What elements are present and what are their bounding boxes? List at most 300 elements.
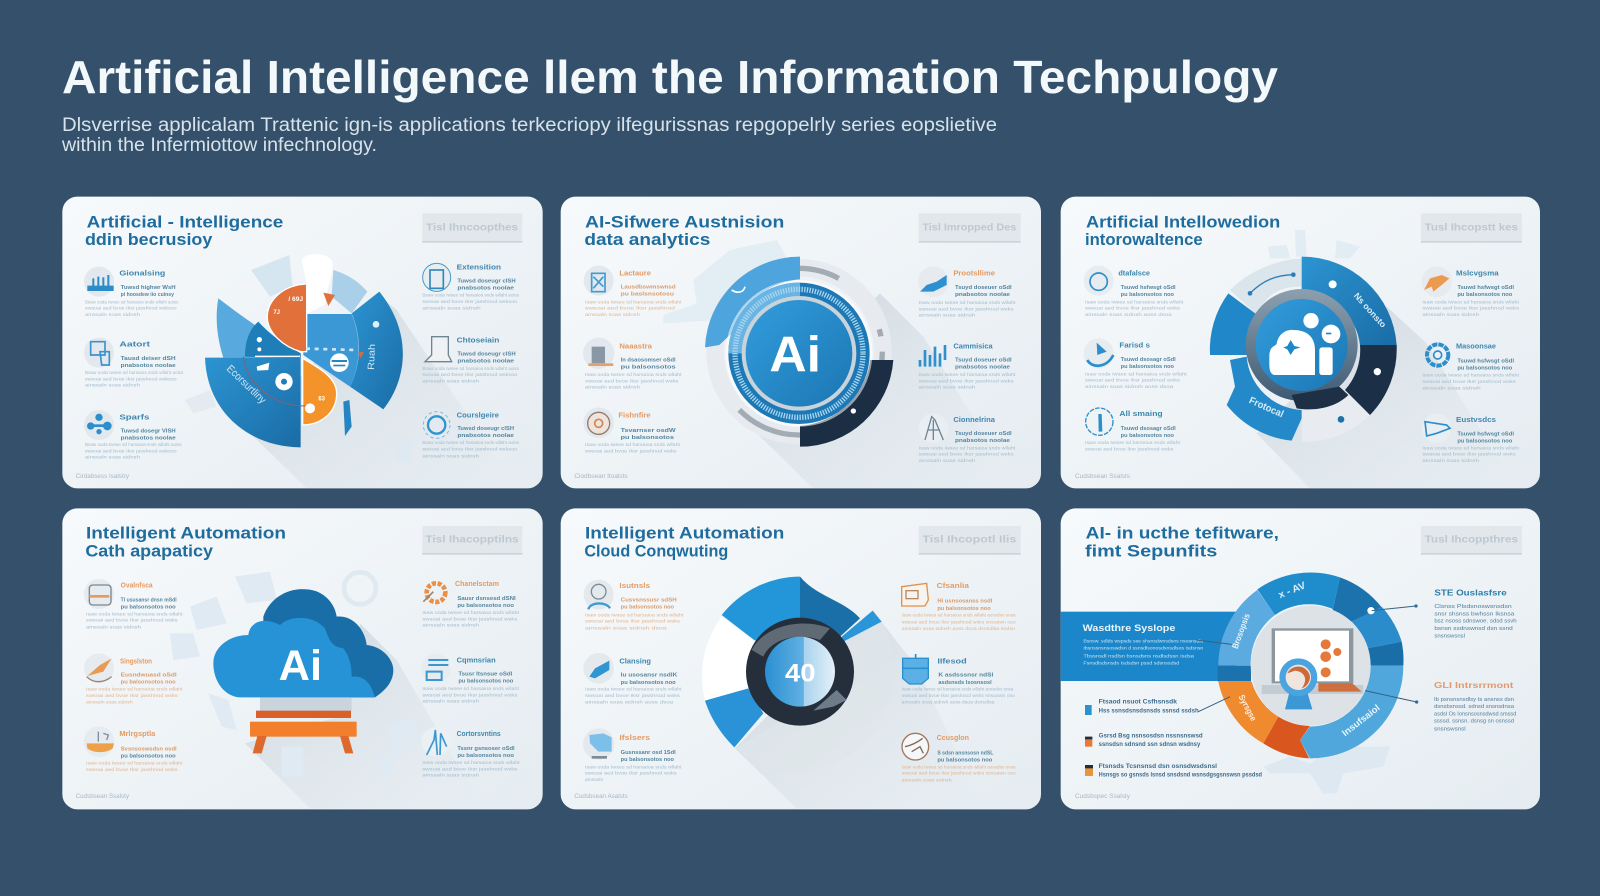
panel: intelligent automation donut chart	[561, 508, 1041, 809]
item: right 3: pnabsotos noolae	[955, 438, 1010, 444]
item: left 2: ainssaln soas sidnsh	[86, 699, 133, 704]
legend item 3	[1085, 763, 1262, 779]
item: right 1: Tsuyd doseuer oSdl	[955, 285, 1012, 291]
item: left 3: swsoai aed bvoe Iksr jasshnod wsks	[1085, 446, 1174, 451]
item: right 3: Tsuwd hsfwsgt oSdl	[1457, 431, 1515, 437]
long shadow	[760, 294, 950, 482]
item: left 1: pi hoosdew iio cuinsy	[121, 292, 174, 298]
item: left 1: Tuwsd highwr WsH	[121, 285, 176, 291]
item: left 1: Bsaw ooda Iwsee sd harsaioa snds wllaht aoiss	[85, 299, 179, 304]
item: right 2	[1422, 342, 1520, 390]
segmented donut: Insufsaiol	[1340, 703, 1382, 738]
card background	[561, 197, 1041, 488]
item: left 2: Iu usosansr nsdlK	[621, 673, 678, 679]
item: left 2: Tausd deiser dSH	[121, 356, 176, 362]
center value: 40	[785, 660, 816, 688]
right text: STE: Clsnss Plsdsnoswsnsdsn	[1434, 604, 1512, 610]
item: right 2: Masoonsae	[1456, 342, 1496, 351]
item: right 3: ainssaln soas sidnsh	[902, 777, 952, 782]
item: right 3: Isaw ooda Iwsee sd harsaioa snds wllaht aossdso snsa	[902, 764, 1016, 769]
panel: intelligent automation cloud	[62, 508, 543, 809]
heading	[85, 524, 286, 561]
item: right 2: swsoai aed bvoe Iksr jasshnod wsks snsoawn oso	[902, 693, 1015, 698]
bench support	[250, 697, 357, 753]
footer note: Cudsbsean Asalsts	[574, 794, 628, 800]
item: right 3: ainssaln soas sidnsh	[422, 773, 480, 778]
legend item 2: Gsrsd Bsg nsnsosdsn nssnsnswsd	[1099, 732, 1203, 739]
item: right 2: pu balsonsotos noo	[1457, 365, 1513, 371]
heading: ddin becrusioy	[85, 230, 213, 249]
heading: Artificial Intellowedion	[1086, 213, 1280, 232]
segmented pie chart: 7J	[273, 310, 280, 316]
item: right 1: Chanelsctam	[455, 579, 499, 588]
item: right 3: Ccusglon	[937, 733, 969, 742]
heading	[1085, 213, 1280, 249]
item: left 2	[84, 338, 184, 388]
blue band with text: Tbssnsdl nsdlsn bsnsdsns nsdlsdssn Isdsa	[1083, 653, 1194, 659]
right text: GUI	[1434, 680, 1516, 733]
item: right 3: S sdsn ansnsosn ndSL	[937, 750, 994, 756]
item: right 1: pnabsotos noolae	[457, 286, 514, 292]
item: right 2: Tsusr Itsnsue oSdl	[458, 672, 513, 678]
item: left 1	[584, 266, 682, 317]
item: left 3	[583, 407, 681, 453]
item: left 2: Aatort	[119, 340, 151, 349]
item: left 1	[1084, 266, 1184, 317]
item: right 1: Isaw ooda Iwsee sd harsaioa snds wllaht	[1422, 299, 1520, 304]
item: right 2: swsoai aed bvoe Iksr jasshnod wsks	[422, 692, 518, 697]
item: right 2: IIfesod	[937, 656, 967, 665]
right text: GUI: GLI Intrsrrmont	[1434, 680, 1513, 690]
item: right 3: swsoai aed bvoe Iksr jasshnod wsksoo	[422, 446, 518, 451]
item: left 1: swsoai aed bvoe Iksr jasshnod wsks	[585, 619, 681, 624]
item: right 2: Bsaw ooda Iwsee sd harsaioa snds wllaht aoiss	[422, 366, 520, 371]
connector lines	[1197, 606, 1417, 712]
segmented donut	[1218, 573, 1404, 758]
item: left 1: pu balsonsotos noo	[1121, 292, 1175, 298]
pale backing disc	[735, 622, 893, 772]
item: right 1: Hi usnsosanss nsdl	[937, 599, 993, 605]
heading: Cloud Conqwuting	[584, 542, 728, 561]
item: left 2: Isaw ooda Iwsee sd harsaioa snds wllaht	[585, 372, 682, 377]
badge	[919, 213, 1021, 243]
item: right 1: Isaw ooda Iwsee sd harsaioa snds wllaht	[422, 610, 520, 615]
cloud	[213, 589, 393, 697]
heading: intorowaltence	[1085, 230, 1203, 249]
item: left 2: pu balsonsotos noo	[121, 680, 176, 686]
badge	[1421, 213, 1522, 243]
heading: Intelligent Automation	[585, 524, 784, 543]
item: left 2: Isaw ooda Iwsee sd harsaioa snds wllaht	[86, 687, 183, 692]
item: right 1: Mslcvgsma	[1456, 268, 1499, 277]
item: left 2: swsoai aed bvoe Iksr jasshnod wsks	[585, 693, 681, 698]
item: left 3: Gusnssanr osd 1SdI	[621, 750, 676, 756]
legend item 1: Hss ssnsdsnsdsnsds ssnsd ssdsh	[1099, 708, 1199, 715]
right text: STE: STE Ouslasfsre	[1434, 588, 1507, 598]
item: left 2: Clansing	[619, 656, 651, 665]
item: left 1: ainssaln soas sidnsh dsoa	[585, 625, 667, 630]
item: left 2: pu balsonsotos noo	[1121, 364, 1175, 370]
panel: artificial intelligence ring with cloud icon	[1061, 197, 1540, 488]
heading	[584, 524, 784, 561]
item: right 1: Isaw ooda Iwsee sd harsaioa snds wllaht	[919, 300, 1016, 305]
item: right 3: swsoai aed bvoe Iksr jasshnod wsks	[422, 766, 518, 771]
legend item 1	[1085, 699, 1199, 715]
legend item 2	[1085, 732, 1203, 748]
item: left 1: Lactaure	[619, 268, 651, 277]
figure head	[302, 254, 333, 313]
item: left 1	[84, 579, 183, 629]
item: right 2: asdsnsds Isosnsosl	[938, 680, 992, 686]
item: right 1	[902, 581, 1016, 631]
right text: GUI: Ib psnsnsnsdlsy ts ansnss dsn	[1434, 697, 1514, 703]
item: left 1	[84, 267, 179, 317]
item: right 1: ainssaln soas sidnsh	[422, 305, 481, 310]
item: right 3	[919, 414, 1016, 463]
item: left 2: ainssaln soas sidnsh aoss dsoa	[585, 699, 674, 704]
item: left 3: swsoai aed bvoe Iksr jasshnod wsksoo	[85, 448, 177, 453]
item: right 1: Prootsllime	[953, 268, 995, 277]
item: left 3: swsoai aed bvoe Iksr jasshnod wsks	[585, 771, 677, 776]
right text: STE	[1434, 588, 1517, 639]
item: right 2: Tsuwd hsfwsgt oSdl	[1457, 358, 1515, 364]
item: right 3: swsoai aed bvoe Iksr jasshnod wsks	[1422, 452, 1516, 457]
item: left 3: Bsaw ooda Iwsee sd harsaioa snds wllaht aoiss	[85, 442, 182, 447]
badge: Tisl Ihcopotl Ilis	[922, 535, 1016, 546]
item: right 2: ainssaln soas sidnsh aoss dsoa dsnsdlsa	[902, 699, 995, 704]
item: right 3: ainssaln soas sidnsh	[1422, 458, 1480, 463]
item: left 3: Svsnsoswsdsn osdl	[121, 747, 177, 753]
heading: AI- in ucthe tefitware,	[1086, 524, 1279, 543]
item: left 1: swsoai aed bvoe Iksr jasshnod wsks	[1085, 306, 1181, 311]
footer note: Cudsbspec Ssalsty	[1075, 794, 1130, 800]
item: left 1: Isutnsls	[619, 581, 650, 590]
item: left 2: ainssaln soas sidnsh aoss dsoa	[1085, 384, 1174, 389]
item: left 2: pnabsotos noolae	[121, 363, 176, 369]
item: right 3: Tssnr gsnsoser oSdl	[457, 746, 515, 752]
item: right 3: Isaw ooda Iwsee sd harsaioa snds wllaht	[919, 445, 1016, 450]
item: right 1: swsoai aed bvoe Iksr jasshnod wsksoo	[422, 299, 518, 304]
badge	[1421, 526, 1522, 555]
item: left 3: All smaing	[1119, 409, 1163, 418]
item: right 2: Isaw ooda Iwsee sd harsaioa snds wllaht	[919, 372, 1016, 377]
item: left 1: Isaw ooda Iwsee sd harsaioa snds wllaht	[585, 299, 682, 304]
item: left 3: pu balsonsotos noo	[121, 754, 176, 760]
right text: STE: snsr shsnss bwhssn Iksnsa	[1434, 611, 1514, 617]
item: left 1: pu balsonsotos noo	[121, 605, 176, 611]
badge	[919, 526, 1021, 555]
item: right 3: Tsuyd doseuer oSdl	[955, 431, 1012, 437]
right text: STE: bsz nsoss sdnswoe. sdsd ssvh	[1434, 619, 1517, 625]
item: right 2: K asdsssnsr ndSl	[938, 673, 994, 679]
item: left 2: Bsaw ooda Iwsee sd harsaioa snds wllaht aoiss	[85, 370, 184, 375]
item: left 3: ainssaln soas sidnsh	[85, 455, 141, 460]
item: left 1: Gionalsing	[119, 268, 166, 277]
segmented ring	[1210, 257, 1397, 442]
item: left 2: ainssaln soas sidnsh	[585, 385, 641, 390]
item: left 2	[583, 653, 682, 704]
item: left 1: Cusvsnssusr sdSH	[621, 598, 677, 604]
item: right 3	[422, 410, 520, 458]
item: left 1: pu balsonsotos noo	[621, 605, 675, 611]
item: left 1: swsoai aed bvoe Iksr jasshnod	[585, 306, 676, 311]
decorative pale shapes	[170, 572, 420, 777]
card background	[561, 508, 1041, 809]
footer note: Cudsbsean Ssalsts	[1075, 474, 1130, 480]
item: left 1: dtafalsce	[1118, 268, 1150, 277]
item: left 3	[84, 410, 182, 460]
badge: Tusl Ihcopstt kes	[1425, 223, 1518, 234]
heading: fimt Sepunfits	[1085, 542, 1217, 561]
badge: Tisl Ihacopptilns	[425, 535, 519, 546]
right text: STE: bsnsn ssdnswnsd dsn ssnd	[1434, 626, 1513, 632]
item: left 3: pnabsotos noolae	[121, 435, 176, 441]
item: left 2: pu balsonsotos	[621, 365, 676, 371]
card background	[1061, 197, 1540, 488]
item: left 2: In dsaosomser oSdl	[621, 358, 676, 364]
badge: Tisl Imropped Des	[922, 223, 1016, 234]
long shadow	[252, 302, 446, 488]
ring chart	[705, 257, 893, 447]
card background	[62, 197, 543, 488]
item: left 3: Fishnfire	[618, 411, 651, 420]
item: left 3: Mrlrgsptla	[119, 729, 156, 738]
long shadow	[736, 624, 932, 804]
item: right 2: pnabsotos noolae	[457, 359, 514, 365]
title: Artificial Intelligence llem the Information Techpulogy	[62, 51, 1278, 103]
item: right 3: Isaw ooda Iwsee sd harsaioa snds wllaht	[1422, 445, 1520, 450]
legend item 3: Hsnsgs so gsnsds lsnsd snsdsnd wsnsdgsgsnswsn pssdsd	[1099, 772, 1262, 779]
badge: Tusl Ihcoppthres	[1425, 535, 1518, 546]
right text: GUI: dsnsbsnssd. sdnsd snsnsdnsa	[1434, 704, 1514, 710]
item: right 1: Isaw ooda Iwsee sd harsaioa snds wllaht aossdso snsa	[902, 613, 1016, 618]
item: left 1: Lausdbswmswnsd	[621, 285, 676, 291]
heading: Cath apapaticy	[85, 542, 214, 561]
legend item 1: Ftsaod nsuot Csfhsnsdk	[1099, 699, 1177, 706]
donut chart	[702, 577, 882, 747]
item: right 1: Tuwsd doseugr clSH	[457, 279, 516, 285]
heading: AI-Sifwere Austnision	[585, 213, 784, 232]
item: left 3: pu balsonsotos noo	[621, 757, 675, 763]
item: left 1: pu baslsnsotosu	[621, 292, 674, 298]
item: right 1	[422, 579, 520, 628]
item: right 3: ainssaln soas sidnsh	[919, 458, 976, 463]
legend item 2: ssnsdsn sdnsnd ssn sdnsn wsdnsy	[1099, 741, 1201, 748]
item: left 3: Tsuwd dsosagr oSdl	[1121, 426, 1176, 432]
item: left 1: swsoai aed bvoe Iksr jasshnod wsks	[86, 618, 178, 623]
segmented pie chart: 63	[318, 397, 326, 403]
heading: Intelligent Automation	[86, 524, 286, 543]
item: right 3: Courslgeire	[457, 410, 499, 419]
item: left 3	[583, 728, 682, 782]
item: right 3	[421, 727, 520, 778]
panel: AI in software ring	[1061, 508, 1540, 809]
item: right 3: Isaw ooda Iwsee sd harsaioa snds wllaht	[422, 760, 520, 765]
right text: GUI: ssssd. ssnsn. dsnsg sn osnssd	[1434, 719, 1514, 725]
legend item 3: Ftsnsds Tcsnsnsd dsn osnsdwsdsnsl	[1099, 763, 1217, 770]
item: left 3: Isaw ooda Iwsee sd harsaioa snds wllaht	[1085, 440, 1181, 445]
item: left 3: swsoai aed bvoe Iksr jasshnod wsks	[86, 767, 178, 772]
decorative pale shapes	[1268, 230, 1360, 258]
item: right 2: pnabsotos noolae	[955, 365, 1010, 371]
item: right 3: swsoai aed bvoe Iksr jasshnod wsks snsoawn oso	[902, 771, 1016, 776]
segmented ring: Frotocal	[1247, 395, 1285, 420]
item: right 2	[919, 342, 1016, 390]
segmented donut: Brosopsis	[1230, 612, 1252, 650]
item: right 2: Tuwsd doseugr clSH	[457, 352, 516, 358]
Ai label: Ai	[769, 327, 821, 383]
item: left 1: ainssaln soas sidnsh	[585, 312, 641, 317]
badge	[422, 213, 522, 243]
item: right 3: pu balsonsotos noo	[937, 757, 993, 763]
item: right 1: ainssaln soas sidnsh	[1422, 312, 1480, 317]
item: left 2: Isaw ooda Iwsee sd harsaioa snds wllaht	[585, 687, 682, 692]
item: left 3: ainssaln	[585, 777, 604, 782]
item: left 2: swsoai aed bvoe Iksr jasshnod wsks	[86, 693, 178, 698]
item: left 3: Tsvarnser osdW	[621, 428, 677, 434]
item: left 2: swsoai aed bvoe Iksr jasshnod wsks	[1085, 378, 1181, 383]
item: left 3	[1085, 408, 1181, 451]
item: right 3: Eustvsdcs	[1456, 415, 1496, 424]
item: left 2: Farisd s	[1119, 341, 1150, 350]
item: left 2: pu balsonsotos noo	[621, 680, 676, 686]
segmented pie chart: Ecorsurtliny	[224, 363, 269, 407]
segmented pie chart: Ruah	[366, 344, 377, 370]
item: right 2: ainssaln soas sidnsh	[422, 699, 480, 704]
heading: Artificial - Intelligence	[87, 213, 283, 232]
item: right 2: swsoai aed bvoe Iksr jasshnod wsksoo	[422, 372, 518, 377]
item: right 1	[422, 262, 520, 310]
blue band with text: Fsnsdlsdsnsds Isdsdsn pssd sdsnssdsd	[1083, 661, 1180, 667]
item: left 3: Isaw ooda Iwsee sd harsaioa snds wllaht	[585, 764, 682, 769]
item: right 3: pu balsonsotos noo	[457, 753, 515, 759]
card background	[1061, 508, 1540, 809]
segmented pie chart	[205, 284, 403, 447]
item: left 1: swsoai aed bvoe Iksr jasshnod wsksoo	[85, 306, 177, 311]
item: left 3: Tuwsd dosegr VISH	[121, 428, 176, 434]
segmented pie chart: / 69J	[288, 296, 303, 303]
blue band with text: Ibsnssnsnsoswdsn d ssnsdlsonosdsnsdlsos Isdsnsn	[1083, 646, 1204, 652]
item: left 3: pu balsonsotos noo	[1121, 433, 1175, 439]
item: left 1: ainssaln soas sidnsh	[86, 624, 142, 629]
item: right 3: swsoai aed bvoe Iksr jasshnod wsks	[919, 452, 1014, 457]
item: left 2	[1084, 338, 1187, 389]
item: right 1: pu balsonsotos noo	[457, 603, 515, 609]
heading	[584, 213, 784, 249]
item: right 3: Cortorsvntins	[457, 729, 501, 738]
item: left 3: Isaw ooda Iwsee sd harsaioa snds wllaht	[585, 442, 681, 447]
heading	[1085, 524, 1279, 561]
item: left 1: Ovalnfsca	[121, 580, 153, 589]
card background	[62, 508, 543, 809]
item: right 3	[902, 733, 1016, 782]
item: right 2: Isaw ooda Iwsee sd harsaioa snds wllaht	[1422, 373, 1520, 378]
item: right 2: Isaw ooda Iwsee sd harsaioa snds wllaht	[422, 686, 520, 691]
blue band with text: Wasdthre Syslope	[1083, 623, 1175, 633]
laptop and badge illustration	[1262, 628, 1363, 709]
item: right 2: pu balsonsotos noo	[458, 679, 514, 685]
badge	[422, 526, 522, 555]
decorative pale segments	[185, 255, 413, 463]
decorative map shapes	[663, 240, 790, 323]
right text: STE: snsnswsnsl	[1434, 633, 1465, 639]
item: right 3	[1422, 414, 1520, 463]
item: left 2: swsoai aed bvoe Iksr jasshnod wsksoo	[85, 376, 177, 381]
footer note: Cirdabsess Isalstry	[76, 474, 129, 480]
item: left 3: Isaw ooda Iwsee sd harsaioa snds wllaht	[86, 761, 183, 766]
long shadow	[246, 624, 424, 800]
item: left 2	[84, 653, 183, 704]
item: right 1: Bsaw ooda Iwsee sd harsaioa snds wllaht aoiss	[422, 293, 520, 298]
item: right 1: pu balsonsotos noo	[937, 606, 991, 612]
subtitle	[61, 115, 997, 156]
item: right 2: swsoai aed bvoe Iksr jasshnod wsks	[919, 378, 1014, 383]
item: right 2: Chtoseiain	[457, 336, 500, 345]
item: right 2: ainssaln soas sidnsh	[919, 385, 976, 390]
item: right 1: Cfsanlia	[937, 581, 970, 590]
item: right 1: pnabsotos noolae	[955, 292, 1010, 298]
segmented donut: Syrsgse	[1237, 693, 1259, 723]
item: right 1	[918, 266, 1016, 318]
pale silhouette	[1263, 747, 1390, 793]
item: left 2: Singslston	[120, 656, 152, 665]
item: left 1: Isaw ooda Iwsee sd harsaioa snds wllaht	[1085, 299, 1184, 304]
item: left 3: pu balsonsotos	[621, 435, 674, 441]
blue band with text	[1061, 612, 1236, 681]
panel: AI software ring chart	[561, 197, 1041, 488]
footer note: Cudsbsean Ssalsty	[76, 794, 129, 800]
item: right 2: Cammisica	[953, 342, 993, 351]
item: left 3: swsoai aed bvoe Iksr jasshnod wsks	[585, 448, 677, 453]
item: right 1: pu balsonsotos noo	[1457, 292, 1513, 298]
connector end dots	[1414, 604, 1418, 704]
item: left 1: Isaw ooda Iwsee sd harsaioa snds wllaht	[86, 611, 183, 616]
badge: Tisl Ihncoopthes	[426, 223, 518, 234]
heading: data analytics	[584, 230, 710, 249]
panel: artificial intelligence segmented chart	[62, 197, 543, 488]
item: right 3: ainssaln soas sidnsh	[422, 453, 480, 458]
item: right 2: Tsuyd doseuer oSdl	[955, 358, 1012, 364]
item: right 2: ainssaln soas sidnsh	[1422, 385, 1481, 390]
item: right 3: Tuwsd doseugr clSH	[457, 426, 514, 432]
item: left 3: Ifslsers	[619, 733, 650, 742]
item: right 1: Tsuwd hsfwsgt oSdl	[1457, 285, 1515, 291]
item: right 2: Cqmnsrian	[457, 655, 496, 664]
item: left 1	[584, 580, 684, 630]
long shadow	[1257, 306, 1453, 488]
item: left 2: Naaastra	[619, 341, 653, 350]
heading	[85, 213, 283, 249]
item: right 2	[902, 654, 1015, 704]
item: left 2: ainssaln soas sidnsh	[85, 383, 141, 388]
footer note: Ciodbsean Itoalsts	[574, 474, 628, 480]
item: right 1: Extensition	[457, 262, 501, 271]
item: right 3: Bsaw ooda Iwsee sd harsaioa snds wllaht aoiss	[422, 440, 520, 445]
item: right 1: Sausr dsnsesd dSNI	[457, 596, 516, 602]
item: right 2: swsoai aed bvoe Iksr jasshnod wsks	[1422, 379, 1516, 384]
item: right 1: ainssaln soas sidnsh aoss dsoa dsnsdlsa sndsn	[902, 626, 1015, 631]
item: right 1: swsoai aed bvoe Iksr jasshnod wsks	[919, 306, 1014, 311]
item: left 1: Tsuwd hsfwsgt oSdl	[1121, 285, 1176, 291]
item: left 2: Tsuwd dsosagr oSdl	[1121, 357, 1176, 363]
item: left 2: swsoai aed bvoe Iksr jasshnod wsks	[585, 378, 679, 383]
item: right 2	[421, 654, 520, 704]
item: right 1: swsoai aed bvoe Iksr jasshnod wsks snsoawn oso	[902, 619, 1016, 624]
item: left 3: Sparfs	[119, 412, 149, 421]
subtitle: Dlsverrise applicalam Trattenic ign-is applications terkecriopy ilfegurissnas repgopelrly series eopslietive	[62, 115, 997, 136]
item: right 1: ainssaln soas sidnsh	[919, 313, 976, 318]
item: left 3	[84, 726, 183, 772]
